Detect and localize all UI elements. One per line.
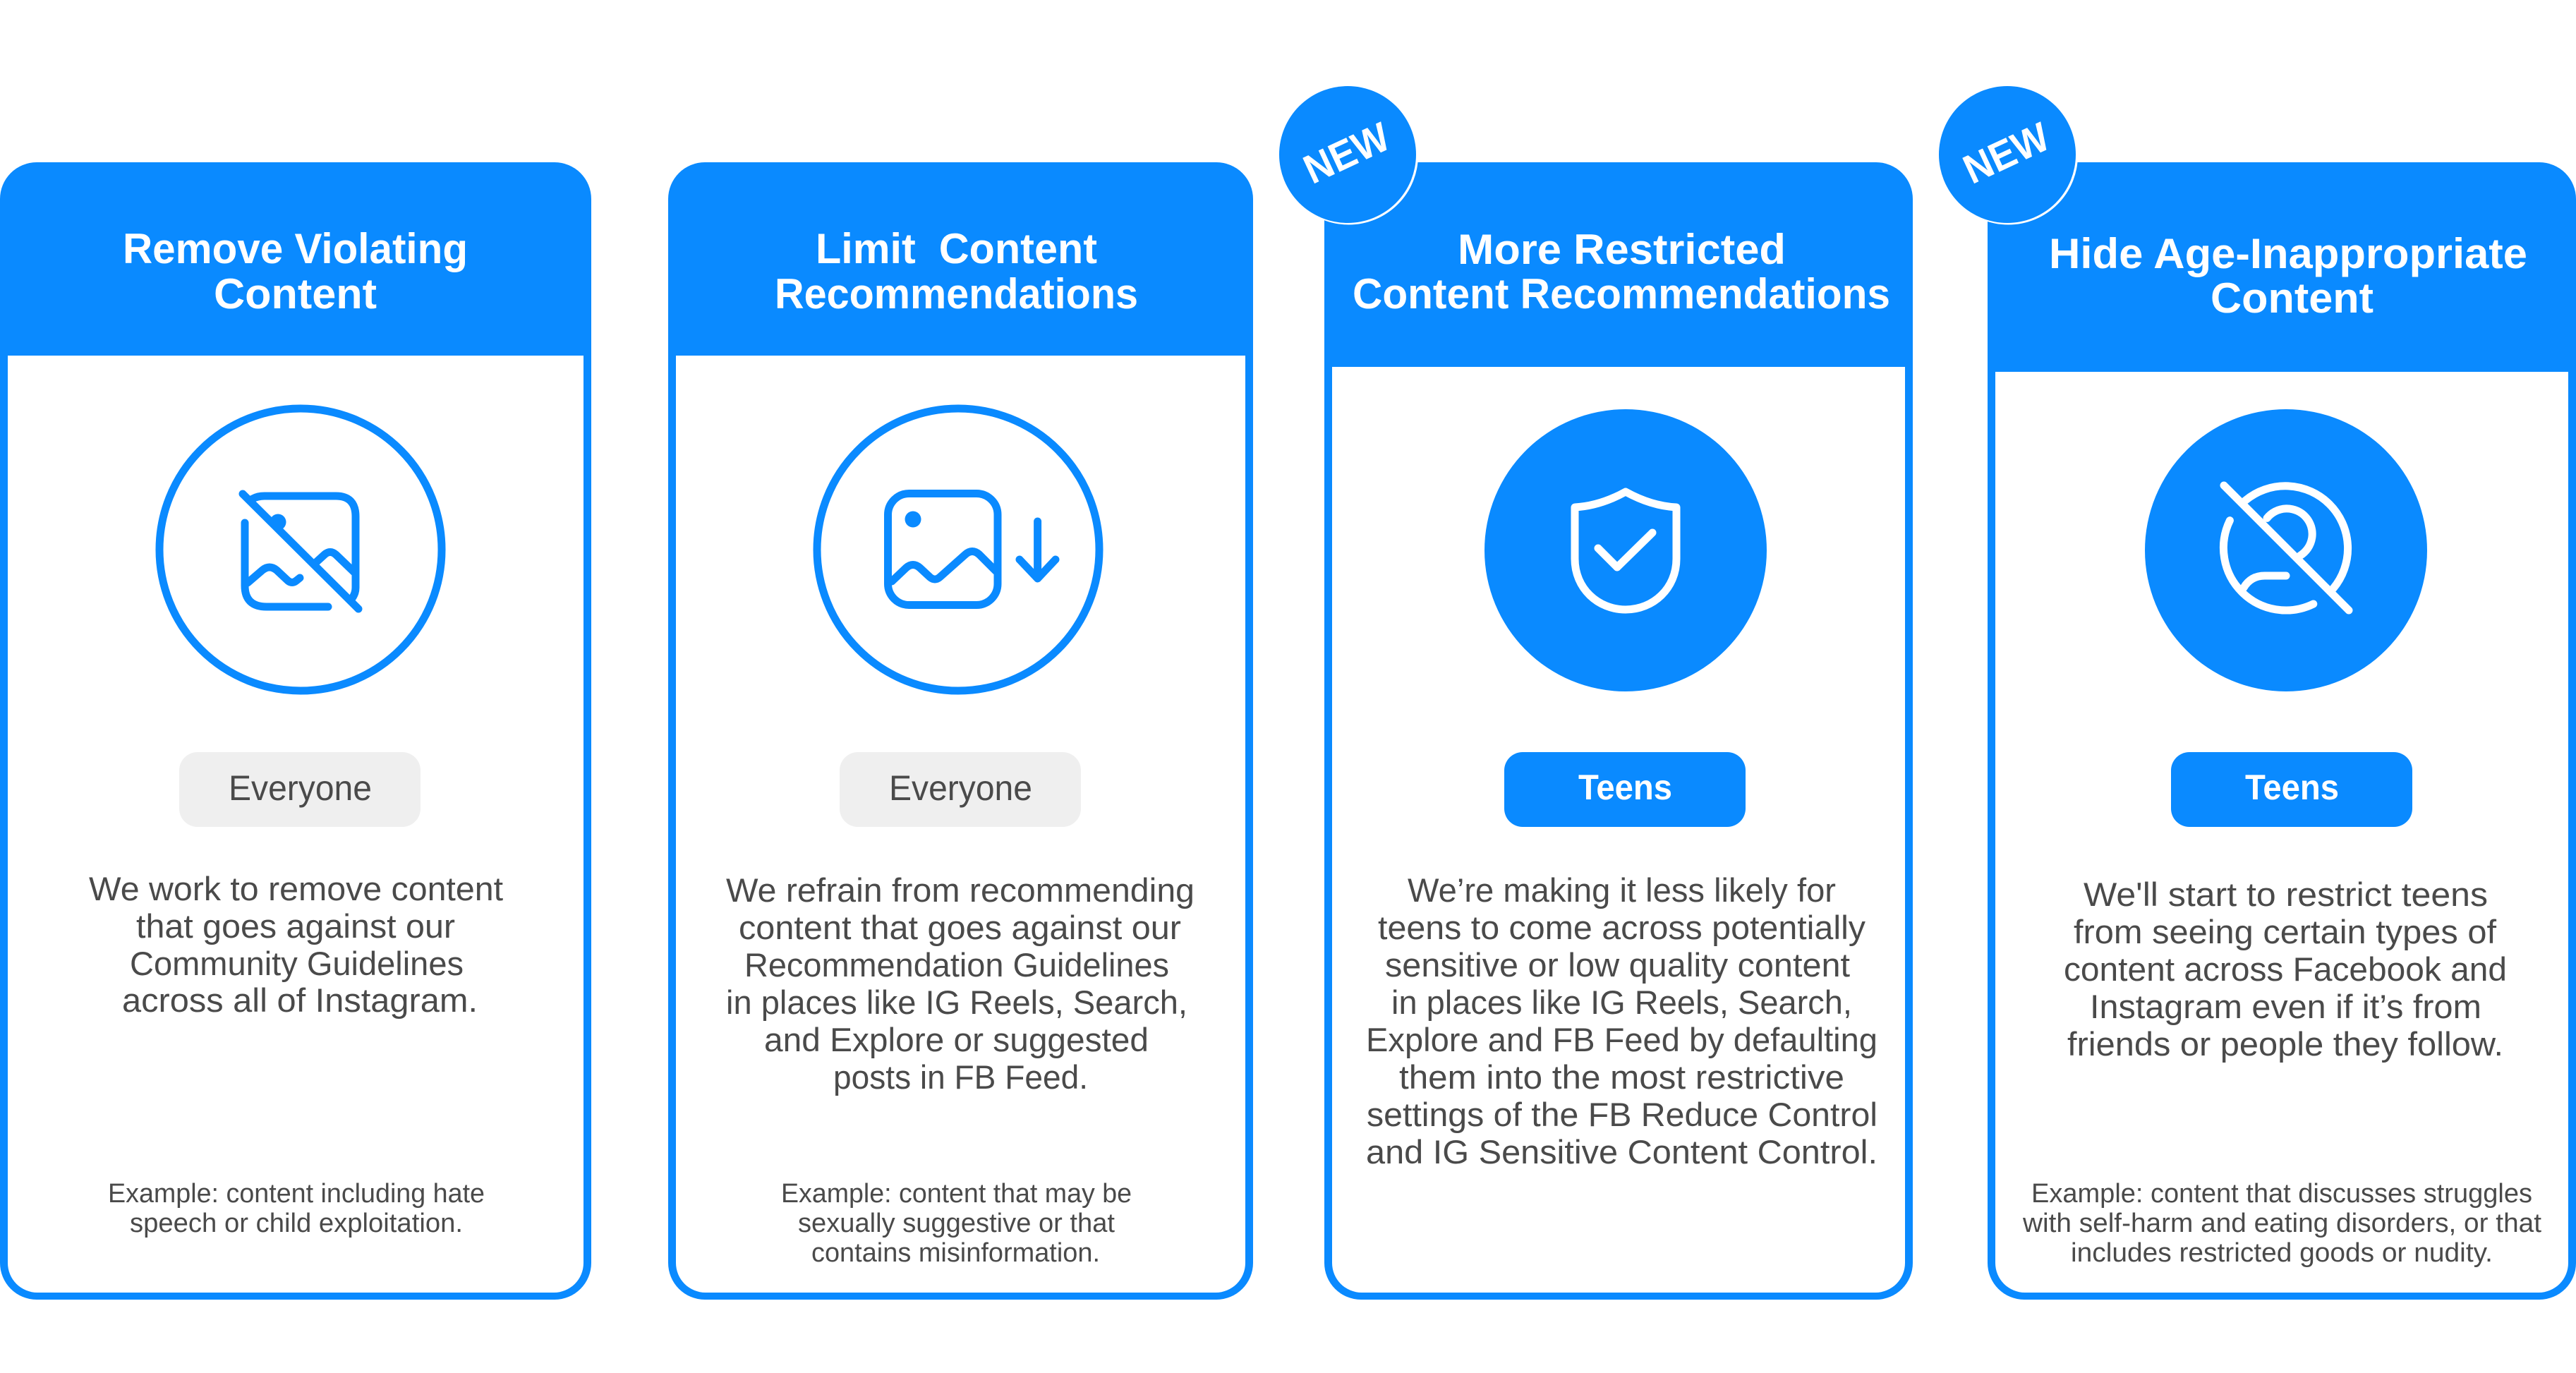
- heading: Remove Violating: [123, 225, 468, 272]
- card frame: [1324, 162, 1913, 1300]
- heading: [2049, 230, 2527, 322]
- description: from seeing certain types of: [2074, 913, 2497, 950]
- description: Community Guidelines: [130, 945, 464, 982]
- card frame: [668, 162, 1253, 1300]
- description: that goes against our: [136, 907, 455, 945]
- heading: Content: [2211, 274, 2374, 322]
- audience pill: [840, 752, 1081, 827]
- icon: person with slash: [2145, 409, 2427, 691]
- description: friends or people they follow.: [2067, 1025, 2503, 1063]
- example: with self-harm and eating disorders, or that: [2022, 1209, 2541, 1238]
- description: across all of Instagram.: [122, 981, 478, 1019]
- panel: remove violating content: [0, 162, 591, 1300]
- description: sensitive or low quality content: [1385, 946, 1850, 984]
- card frame: [0, 162, 591, 1300]
- panel: limit content recommendations: [668, 162, 1253, 1300]
- description: content across Facebook and: [2064, 950, 2507, 988]
- description: [1366, 871, 1877, 1171]
- panel: more restricted content recommendations: [1279, 86, 1913, 1300]
- description: Explore and FB Feed by defaulting: [1366, 1021, 1877, 1058]
- badge: new: NEW: [1297, 114, 1397, 193]
- heading: Content: [214, 270, 377, 317]
- heading: More Restricted: [1458, 226, 1786, 273]
- example: Example: content including hate: [108, 1179, 485, 1209]
- description: posts in FB Feed.: [833, 1058, 1088, 1096]
- description: [89, 870, 503, 1019]
- example: Example: content that may be: [781, 1179, 1132, 1209]
- example: sexually suggestive or that: [798, 1209, 1115, 1238]
- audience pill: [2171, 752, 2412, 827]
- audience pill: Everyone: [229, 768, 372, 808]
- audience pill: [179, 752, 421, 827]
- example: [781, 1179, 1132, 1268]
- badge: new: NEW: [1957, 114, 2057, 193]
- description: We work to remove content: [89, 870, 503, 907]
- heading: Content Recommendations: [1353, 270, 1890, 317]
- audience pill: [1504, 752, 1746, 827]
- description: [726, 871, 1195, 1096]
- badge: new: [1279, 86, 1418, 224]
- icon: image with slash: [159, 409, 442, 691]
- description: and Explore or suggested: [764, 1021, 1149, 1058]
- description: Instagram even if it’s from: [2090, 988, 2481, 1025]
- description: and IG Sensitive Content Control.: [1366, 1133, 1877, 1171]
- example: Example: content that discusses struggles: [2031, 1179, 2532, 1209]
- badge: new: [1939, 86, 2078, 224]
- example: [108, 1179, 485, 1238]
- example: includes restricted goods or nudity.: [2071, 1238, 2493, 1268]
- example: contains misinformation.: [811, 1238, 1100, 1268]
- icon: image with down arrow: [817, 409, 1099, 691]
- audience pill: Teens: [2245, 768, 2339, 807]
- description: We'll start to restrict teens: [2084, 876, 2488, 913]
- example: speech or child exploitation.: [130, 1209, 463, 1238]
- heading: [775, 225, 1138, 317]
- example: [2022, 1179, 2541, 1268]
- heading: Recommendations: [775, 270, 1138, 317]
- description: [2064, 876, 2507, 1063]
- description: Recommendation Guidelines: [744, 946, 1169, 984]
- heading: [1353, 226, 1890, 317]
- heading: Hide Age-Inappropriate: [2049, 230, 2527, 277]
- description: them into the most restrictive: [1399, 1058, 1844, 1096]
- description: in places like IG Reels, Search,: [1391, 984, 1852, 1021]
- description: We’re making it less likely for: [1408, 871, 1836, 909]
- card frame: [1988, 162, 2576, 1300]
- audience pill: Teens: [1578, 768, 1672, 807]
- description: settings of the FB Reduce Control: [1367, 1096, 1877, 1133]
- panel: hide age-inappropriate content: [1939, 86, 2576, 1300]
- heading: Limit Content: [816, 225, 1097, 272]
- description: content that goes against our: [739, 909, 1181, 946]
- icon: shield with check: [1484, 409, 1767, 691]
- description: in places like IG Reels, Search,: [726, 984, 1187, 1021]
- heading: [123, 225, 468, 317]
- description: teens to come across potentially: [1378, 909, 1866, 946]
- audience pill: Everyone: [889, 768, 1032, 808]
- description: We refrain from recommending: [726, 871, 1195, 909]
